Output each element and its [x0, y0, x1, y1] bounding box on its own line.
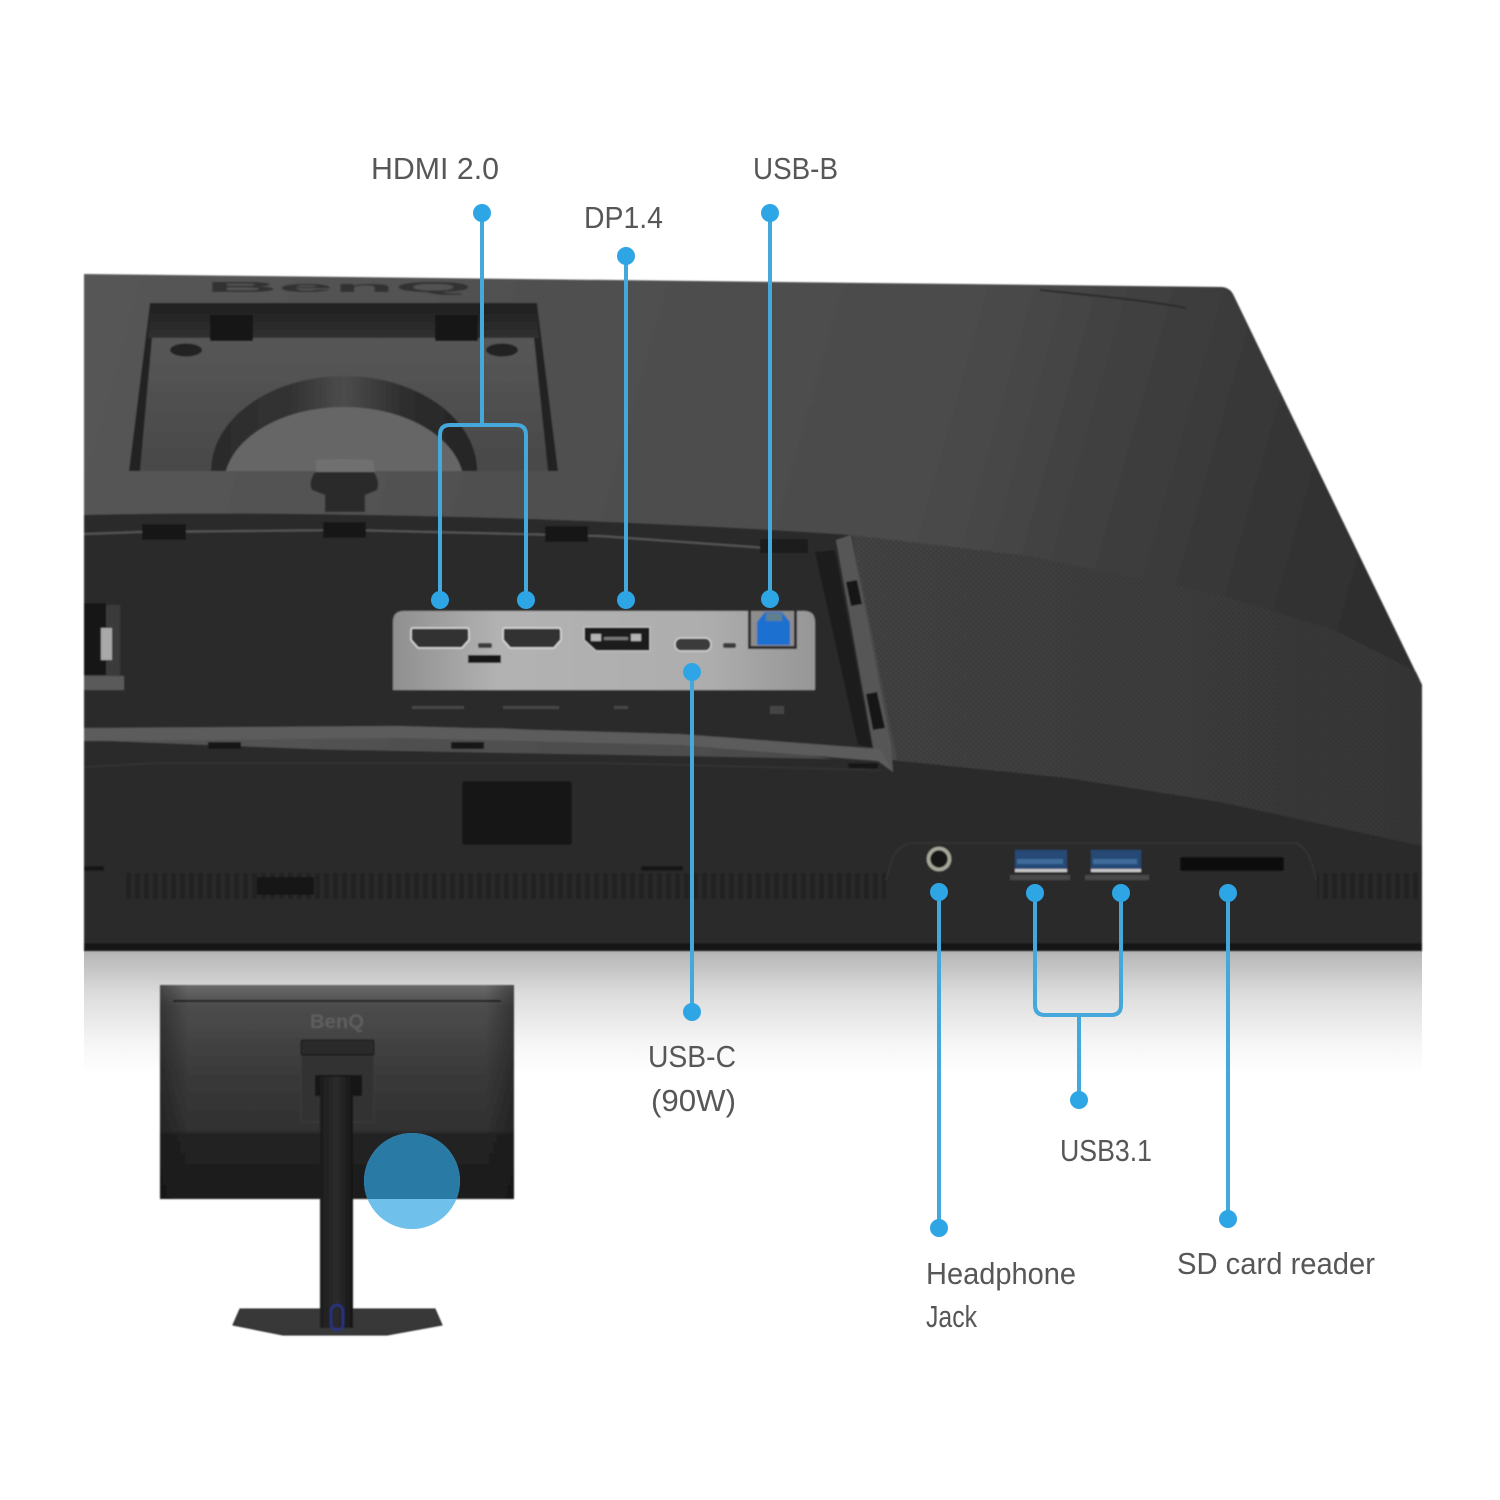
BenQ logo on shell: BenQ	[206, 279, 472, 295]
port recess	[84, 514, 893, 772]
label: USB-C (90W)	[648, 1039, 736, 1118]
stand mount recess	[128, 302, 558, 472]
leader: DP1.4	[617, 247, 635, 609]
USB-A port 2	[1085, 850, 1149, 880]
lower body under mesh	[84, 745, 1422, 950]
cable loop	[331, 1305, 343, 1330]
vent strip right	[1317, 873, 1422, 899]
HDMI port 1	[411, 628, 469, 648]
small monitor thumbnail	[160, 985, 514, 1335]
leader: USB-C	[683, 663, 701, 1021]
USB-C port	[675, 638, 711, 651]
label: SD card reader: SD card reader	[1177, 1246, 1375, 1281]
recess lower lip	[84, 726, 893, 772]
left cable clip	[84, 603, 124, 690]
vent strip left	[84, 866, 886, 899]
label: Headphone Jack: Headphone	[926, 1256, 1076, 1291]
leader: HDMI 2.0	[431, 204, 535, 609]
highlight circle	[364, 1133, 460, 1229]
handle	[301, 1040, 374, 1055]
HDMI port 2	[503, 628, 561, 648]
HDMI divider marks	[468, 643, 501, 663]
lip tabs	[208, 742, 878, 770]
DisplayPort	[584, 627, 650, 651]
monitor upper shell	[84, 274, 1422, 846]
side panel bezel	[886, 843, 1316, 880]
leader: headphone jack	[930, 883, 948, 1237]
label: USB-C (90W): (90W)	[651, 1083, 736, 1118]
speaker mesh	[852, 535, 1422, 846]
stand base	[233, 1309, 442, 1335]
stand latch	[311, 459, 378, 512]
floor shadow under monitor	[84, 950, 1422, 1075]
bottom edge	[84, 943, 1422, 951]
top edge logo stroke	[1040, 290, 1186, 308]
monitor close-up photo	[84, 274, 1422, 951]
stand column	[320, 1077, 353, 1328]
label: HDMI 2.0: HDMI 2.0	[371, 151, 499, 186]
leader: SD card reader	[1219, 884, 1237, 1228]
logo: BenQ	[310, 1012, 364, 1033]
label: DP1.4: DP1.4	[584, 200, 663, 235]
leader: USB-B	[761, 204, 779, 608]
SD card slot	[1180, 857, 1284, 871]
label: USB-B: USB-B	[753, 151, 838, 186]
stand collar	[315, 1075, 362, 1096]
indicator mark	[723, 643, 736, 648]
headphone jack	[928, 848, 950, 870]
label: USB-C (90W): USB-C	[648, 1039, 736, 1074]
screen back	[160, 985, 514, 1199]
label: USB3.1: USB3.1	[1060, 1133, 1152, 1168]
USB-B port	[748, 609, 797, 649]
cutout rectangle	[462, 781, 572, 845]
USB-A port 1	[1010, 850, 1070, 880]
port labels strip	[412, 706, 784, 714]
monitor lower body	[84, 700, 1422, 950]
body seam	[84, 763, 880, 770]
label: Headphone Jack: Jack	[926, 1299, 977, 1334]
leader: USB3.1	[1026, 884, 1130, 1109]
label: Headphone Jack	[926, 1256, 1076, 1334]
neck plate	[301, 1055, 374, 1122]
port plate	[393, 611, 815, 690]
